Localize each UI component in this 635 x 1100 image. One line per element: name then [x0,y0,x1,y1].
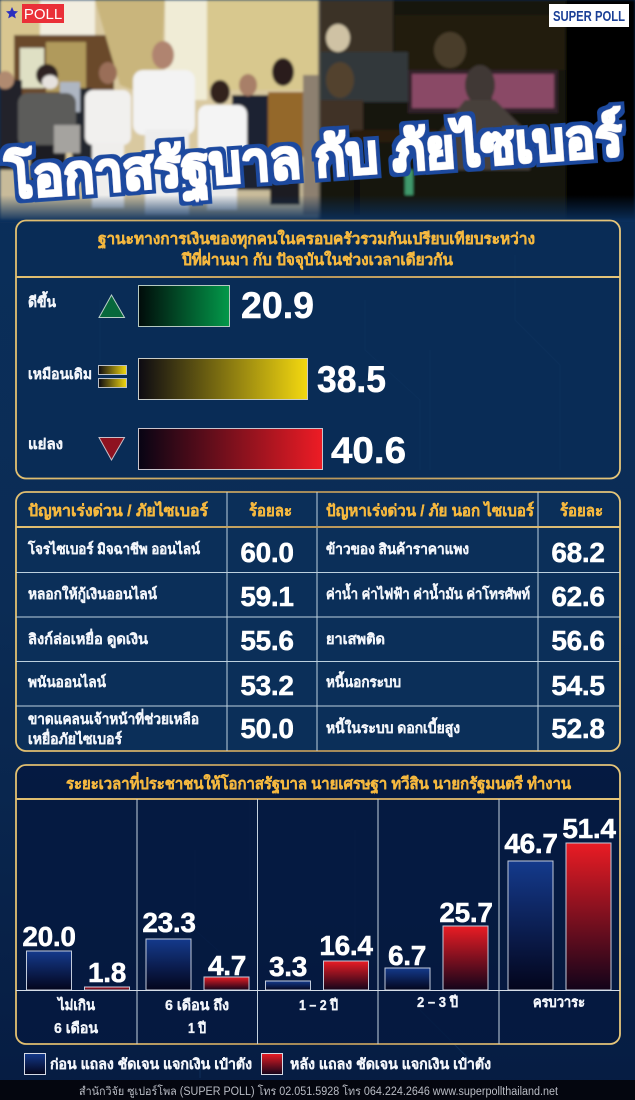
table left labels: โจรไซเบอร์ มิจฉาชีพ ออนไลน์ [27,540,200,558]
bar values: 23.3 [142,907,196,938]
panel: financial status [16,220,620,478]
table right labels: หนี้ในระบบ ดอกเบี้ยสูง [326,717,460,737]
bar values: 4.7 [208,950,246,981]
icon: equal bars [98,366,126,388]
table header: ปัญหาเร่งด่วน / ภัย นอก ไซเบอร์ [326,501,534,521]
bar values: 1.8 [88,957,126,988]
row: worse 40.6: แย่ลง [28,437,63,453]
legend: หลัง แถลง ชัดเจน แจกเงิน เป๋าตัง [290,1056,491,1073]
table right labels: ค่าน้ำ ค่าไฟฟ้า ค่าน้ำมัน ค่าโทรศัพท์ [326,583,530,603]
table left values [240,537,294,744]
table header [28,501,603,521]
legend [24,1054,491,1074]
table left labels: ขาดแคลนเจ้าหน้าที่ช่วยเหลือ [28,708,199,728]
table right values: 54.5 [551,670,605,701]
category labels: 1 ปี [188,1020,206,1037]
heading: financial status: ปีที่ผ่านมา กับ ปัจจุบันในช่วงเวลาเดียวกัน [181,248,453,270]
category labels: 2 – 3 ปี [417,994,458,1011]
footer: สำนักวิจัย ซูเปอร์โพล (SUPER POLL) โทร 02.051.5928 โทร 064.224.2646 www.superpollthailand.net [79,1084,559,1098]
table left values: 59.1 [240,581,294,612]
badge: POLL: POLL [24,6,62,23]
table left labels: พนันออนไลน์ [28,673,106,691]
hero photo: government and hacker scene [0,0,635,220]
category labels: ครบวาระ [533,995,585,1011]
category labels: 6 เดือน ถึง [165,997,229,1014]
row: worse 40.6 [28,428,406,471]
panel: time given to government chart [16,765,620,1044]
table left values: 55.6 [240,625,294,656]
table left values: 60.0 [240,537,294,568]
bar values: 3.3 [269,951,307,982]
row: same 38.5 [28,358,386,400]
table header: ร้อยละ [560,502,603,520]
table left labels [27,540,200,748]
circuit background lines [100,255,560,1078]
bar values: 25.7 [439,897,493,928]
panel: urgent problems table [16,492,620,751]
bar values: 46.7 [504,828,558,859]
heading: financial status: ฐานะทางการเงินของทุกคนในครอบครัวรวมกันเปรียบเทียบระหว่าง [98,229,535,249]
footer [0,1080,635,1100]
table left labels: ลิงก์ล่อเหยื่อ ดูดเงิน [28,628,148,648]
table header: ปัญหาเร่งด่วน / ภัยไซเบอร์ [28,501,208,521]
category labels: ไม่เกิน [56,996,95,1014]
row: worse 40.6: 40.6 [331,430,406,471]
row: same 38.5: 38.5 [317,359,386,400]
table right labels [326,541,530,737]
icon: up triangle [99,295,124,318]
table left values: 53.2 [240,670,294,701]
table right labels: ข้าวของ สินค้าราคาแพง [326,541,469,558]
heading: chart: ระยะเวลาที่ประชาชนให้โอกาสรัฐบาล นายเศรษฐา ทวีสิน นายกรัฐมนตรี ทำงาน [66,772,571,794]
bar values: 20.0 [22,921,76,952]
table right values: 62.6 [551,581,605,612]
bar chart [26,843,611,990]
table header: ร้อยละ [249,502,292,520]
row: better 20.9: 20.9 [241,285,314,326]
table left labels: เหยื่อภัยไซเบอร์ [28,728,122,748]
category labels [54,994,585,1037]
heading: financial status [98,229,535,270]
table right labels: หนี้นอกระบบ [326,671,401,691]
icon: down triangle [99,438,124,460]
table left values: 50.0 [240,713,294,744]
table left labels: หลอกให้กู้เงินออนไลน์ [28,585,157,603]
category labels: 1 – 2 ปี [299,997,338,1014]
row: better 20.9 [28,285,314,326]
icon: star [6,7,18,18]
table right values: 56.6 [551,625,605,656]
table right values: 52.8 [551,713,605,744]
row: better 20.9: ดีขึ้น [28,291,56,311]
bar values: 6.7 [388,940,426,971]
table right values [551,537,605,744]
row: same 38.5: เหมือนเดิม [28,366,92,383]
logo: SUPER POLL [549,4,629,27]
legend: ก่อน แถลง ชัดเจน แจกเงิน เป๋าตัง [50,1056,252,1073]
table right labels: ยาเสพติด [326,631,385,648]
bar values: 16.4 [319,930,373,961]
table right values: 68.2 [551,537,605,568]
bar values [22,813,616,988]
badge: POLL [6,4,64,23]
bar values: 51.4 [562,813,616,844]
category labels: 6 เดือน [54,1020,98,1037]
